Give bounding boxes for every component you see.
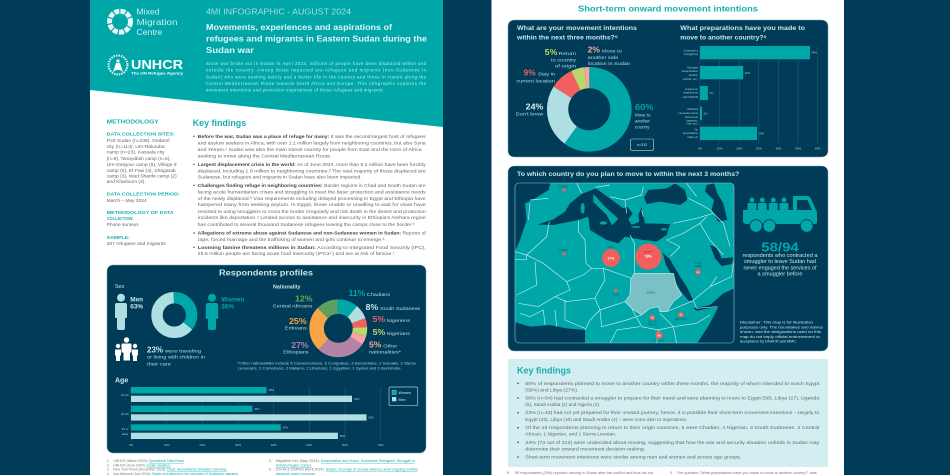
map disclaimer: purposes only. The boundaries and names	[740, 326, 823, 330]
bar chart: preparations: documents	[685, 115, 699, 119]
women label: Women	[221, 297, 244, 304]
map: 2%	[651, 317, 654, 319]
bar chart: preparations: preparations	[683, 131, 699, 135]
icon: woman	[206, 294, 218, 330]
nationality labels: 8%	[366, 303, 378, 312]
bar chart: preparations: (passport,	[686, 118, 698, 122]
intentions labels: of origin	[555, 63, 577, 68]
logo: UNHCR: The UN Refugee Agency	[131, 72, 184, 76]
references: Amhara Region Camps.	[276, 463, 312, 467]
map: 2%	[680, 315, 683, 317]
methodology column: DATA COLLECTION SITES:	[107, 132, 175, 138]
bar chart: preparations: 40%	[775, 146, 782, 150]
smuggler stat: smuggler to leave Sudan had	[744, 259, 816, 265]
bar chart: age: older	[122, 432, 128, 436]
smuggler stat: respondents who contracted a	[742, 253, 818, 259]
bar chart: preparations: vehicle, etc.)	[683, 77, 698, 81]
nationality labels: 5%	[373, 328, 385, 337]
bar chart: age: 58%	[340, 434, 346, 438]
bar chart: preparations: (tickets,	[689, 73, 698, 77]
men label: 63%	[130, 303, 143, 310]
title: Sudan war	[206, 45, 255, 55]
key findings text: of the newly displaced.³ Visa requirements including delayed processing in Egypt and Ethiopia have	[198, 196, 426, 201]
intentions labels: 2%	[588, 46, 600, 55]
bar chart: preparations: Leaving on	[685, 87, 698, 91]
country labels: FRANCE	[559, 186, 569, 189]
intentions labels: Don't know	[516, 112, 544, 117]
methodology column: Um-Gargour camp (5), Village 8	[107, 162, 177, 167]
country labels: SAUDI	[694, 262, 702, 265]
country labels: ETHIOPIA	[675, 318, 687, 321]
panel: intentions and preparations	[508, 20, 828, 157]
nationality labels: Central Africans	[273, 303, 313, 308]
page 1	[90, 0, 443, 475]
intro text: Central Mediterranean Route towards North Africa and Europe. This infographic explores the	[206, 81, 427, 86]
country labels: ALGERIA	[558, 249, 569, 252]
country labels: ARABIA	[693, 265, 703, 268]
bar chart: age: 34%	[254, 407, 260, 411]
legend: age	[389, 387, 418, 406]
methodology column: camp (5), El-Faw (3), Shagarab	[107, 168, 176, 173]
methodology column	[107, 120, 180, 246]
bar chart: preparations: resettlement	[683, 91, 698, 95]
panel: respondents profiles	[107, 265, 426, 453]
bar chart: preparations: 56%	[812, 50, 817, 54]
intro text: Sudan) who were seeking safety and a better life in the country and those in transit along the	[206, 74, 427, 79]
sample size box: n=312	[637, 143, 647, 147]
smuggler stat	[742, 240, 818, 277]
intentions labels: Move to	[635, 112, 651, 117]
methodology column: city (n=113), Um-Rakouba	[107, 144, 165, 149]
methodology column: METHODOLOGY OF DATA	[107, 210, 174, 216]
smuggler stat: 58/94	[761, 240, 800, 254]
methodology column: DATA COLLECTION PERIOD:	[107, 192, 180, 198]
bar chart: preparations: 10%	[717, 146, 723, 150]
nationality labels: Nigerians	[387, 331, 411, 336]
logo: UNHCR: UNHCR	[131, 58, 183, 72]
map: 59%	[645, 254, 652, 258]
bar chart: preparations: 50%	[795, 146, 801, 150]
nationality labels: South Sudanese	[380, 306, 421, 311]
nationality labels: 5%	[373, 315, 385, 324]
key findings text: Allegations of extreme abuse against Sudanese and non-Sudanese women in Sudan: Reports of	[198, 230, 427, 236]
question: preparations	[680, 25, 805, 41]
map disclaimer: acceptance by UNHCR and MMC.	[740, 340, 797, 344]
intentions labels: 9%	[524, 69, 536, 78]
map: 2%	[697, 272, 700, 274]
references: 6.	[269, 468, 272, 472]
methodology column: camp (3), Wad Sharife camp (2)	[107, 174, 177, 179]
country labels: LIBYA	[608, 246, 615, 249]
key findings heading: Key findings	[193, 118, 246, 129]
key findings text: rape, forced marriage and the trafficking of women and girls continue to emerge.⁶	[198, 237, 385, 242]
key findings text: has contributed to several thousand Sudanese refugees leaving the camps close to the border.⁵	[198, 222, 415, 227]
bar chart: preparations: 4%	[710, 91, 714, 95]
icon: family	[115, 337, 138, 361]
key findings 2 text: determine their onward movement decision-making.	[525, 446, 645, 452]
bar chart: age: 0%	[129, 443, 133, 447]
children stat: 23%	[147, 345, 163, 354]
bar chart: preparations: Contacted a	[684, 49, 698, 53]
nationality labels: Eritreans	[285, 325, 308, 330]
nationality labels: 25%	[289, 317, 307, 326]
page 2 heading: Short-term onward movement intentions	[578, 4, 758, 14]
bar chart: preparations: 30%	[756, 146, 762, 150]
key findings text: incidents like deportation.⁴ Limited access to assistance and insecurity in Ethiopia's Amhara region	[198, 215, 426, 220]
header band	[90, 0, 443, 127]
children stat: their care	[147, 361, 172, 366]
question: preparations: What preparations have you made to	[680, 25, 805, 32]
logo: Mixed Migration Centre	[110, 8, 178, 37]
intentions labels: Move to	[602, 49, 622, 54]
country markers	[562, 188, 701, 339]
map	[513, 182, 737, 347]
nationality heading: Nationality	[273, 284, 301, 290]
children stat: were traveling	[165, 348, 202, 353]
bar chart: age: 50%	[306, 443, 313, 447]
references: OCHA & OSRSG (April 2024): Sudan: Scourge of sexual violence amid ongoing conflict	[276, 468, 418, 472]
respondents heading: Respondents profiles	[219, 269, 314, 278]
bar chart: preparations: necessary travel	[678, 111, 698, 115]
title	[206, 22, 427, 55]
nationality labels: nationalities*	[369, 350, 401, 355]
bar chart: age: 38%	[268, 388, 274, 392]
key findings text: displaced, including 1.9 million to neighboring countries.² The vast majority of those displaced are	[198, 168, 426, 174]
key findings text: 25.6 million people are facing acute food insecurity (IPC3+) and are at risk of famine.⁷	[198, 251, 395, 256]
map question: To which country do you plan to move to within the next 3 months?	[517, 171, 739, 178]
women label: 36%	[221, 303, 234, 310]
header label: 4MI INFOGRAPHIC - AUGUST 2024	[206, 8, 352, 17]
intentions labels: another safe	[588, 55, 619, 60]
map disclaimer	[740, 320, 823, 344]
bar chart: preparations: 0%	[698, 146, 702, 150]
bar chart: preparations: 20%	[736, 146, 743, 150]
references: UNHCR (June 2024): Sudan situation.	[113, 463, 171, 467]
intentions labels: another	[635, 118, 650, 123]
methodology column: March – May 2024	[107, 198, 147, 203]
intentions labels: location in Sudan	[588, 61, 631, 66]
key findings text: resorted to using smugglers to cross the border irregularly and risk death in the desert and protection	[198, 209, 426, 214]
methodology column: SAMPLE:	[107, 235, 130, 241]
country borders	[515, 183, 733, 343]
references: UNHCR (March 2023): Operational Data Portal	[113, 459, 184, 463]
intentions labels: country	[635, 124, 650, 130]
nationality labels: Ethiopians	[283, 349, 310, 354]
map disclaimer: shown, and the designations used on this	[740, 330, 821, 334]
intentions labels	[516, 46, 654, 130]
legend: age: Women	[398, 391, 411, 395]
bar chart: age	[121, 387, 384, 447]
map: 6%	[657, 334, 662, 337]
question: intentions	[516, 25, 637, 41]
methodology column: and Khartoum (3).	[107, 179, 146, 184]
bar chart: preparations: with UNHCR	[683, 95, 698, 99]
bar chart: age: 70%	[378, 443, 384, 447]
nationality footnote	[238, 361, 416, 370]
question: intentions: What are your movement intentions	[517, 25, 637, 32]
key findings 2 heading: Key findings	[517, 365, 571, 376]
methodology column: 407 refugees and migrants	[107, 241, 167, 246]
country labels: SUDAN	[646, 291, 655, 294]
key findings 2 text: 56% (n=94) had contracted a smuggler to prepare for their travel and were planning to move to Egypt (58), Libya (27), Uganda	[525, 396, 820, 400]
bar chart: age: 30%	[235, 443, 241, 447]
nationality labels: Nigeriens	[387, 318, 411, 323]
key findings 2 text: African, 1 Nigerien, and 1 Sierra Leonian.	[525, 432, 616, 436]
sample size box	[630, 139, 654, 150]
Sudan	[625, 273, 682, 315]
bar chart: age: 66%	[368, 415, 374, 419]
key findings 2 text: Egypt (32), Libya (10) and Saudi Arabia (4) – were more akin to aspirations.	[525, 417, 687, 422]
legend: age: Men	[398, 398, 406, 402]
nationality footnote: Leoneans, 2 Comorians, 2 Malians, 2 Liberians, 1 Egyptian, 1 Syrian and 1 Burkinabe.	[238, 366, 402, 370]
men label: Men	[130, 297, 143, 304]
nationality labels	[273, 289, 421, 355]
nationality footnote: *Other nationalities include 6 Cameroonians, 6 Congolese, 3 Burundians, 2 Somalis, 2 Sierra	[238, 361, 416, 365]
donut: intentions	[558, 78, 621, 141]
intentions labels: to country	[551, 57, 577, 62]
key findings 2 text: 23% (n=43) had not yet prepared for their onward journey; hence, it is possible their short-term movement intentions – largely to	[525, 410, 820, 415]
country labels	[558, 186, 703, 342]
key findings text: and asylum seekers in Africa, with over 1.1 million largely from neighboring countries, but also Syria	[198, 140, 426, 146]
references: 2.	[107, 463, 110, 467]
intentions labels: 60%	[635, 103, 654, 112]
country labels: EGYPT	[644, 251, 653, 254]
key findings 2 text: Of the 16 respondents planning to return to their origin countries, 5 were Chadian, 4 Nigerian, 3 South Sudanese, 2 Central	[525, 425, 819, 430]
bar chart: preparations	[678, 46, 821, 150]
bar chart: preparations: No	[695, 128, 699, 132]
page 2 footnotes: 9	[670, 471, 672, 475]
title: Movements, experiences and aspirations of	[206, 22, 392, 32]
panel: destination map	[508, 166, 828, 351]
key findings 2 text	[525, 381, 820, 460]
seas	[513, 182, 737, 347]
bar chart: preparations: smuggler(s)	[684, 52, 698, 56]
bar chart: age: 20%	[199, 443, 206, 447]
references: 1.	[107, 459, 110, 463]
references: Migration Info (May 2024): Desperation and Hope: Sudanese Refugees' Struggle in	[276, 459, 415, 463]
nationality labels: 12%	[295, 295, 312, 304]
panel: key findings 2	[508, 359, 828, 467]
key findings text: hampered many from seeking asylum. In Egypt, those unable or unwilling to wait for visas have	[198, 202, 426, 207]
key findings text: Largest displacement crisis in the world: As of June 2024, more than 9.2 million have been forcibly	[198, 162, 427, 167]
key findings text: Challenges finding refuge in neighboring countries: Border regions in Chad and South Sudan are	[198, 183, 426, 188]
bar chart: preparations: 29%	[758, 132, 764, 136]
intentions labels: 5%	[545, 48, 557, 57]
bar chart: preparations: 1%	[704, 111, 708, 115]
map: 27%	[608, 256, 614, 260]
bar chart: age: 16-24	[121, 393, 129, 397]
nationality labels: 11%	[349, 289, 365, 298]
children stat: or living with children in	[147, 355, 206, 360]
key findings text: Looming famine threatens millions in Sudan: According to Integrated Food Security (IPC),	[198, 245, 426, 250]
key findings 2 text: 24% (73 out of 312) were undecided about moving, suggesting that how the war and security situation unfolds in Sudan may	[525, 440, 820, 445]
logo: Mixed Migration Centre: Migration	[136, 18, 178, 27]
smuggler stat: a smuggler before	[758, 271, 803, 277]
methodology column: Port Sudan (n=238), Gedaref	[107, 138, 171, 143]
key findings text: facing acute humanitarian crises and struggling to meet the basic protection and assistance needs	[198, 190, 427, 194]
question: preparations: move to another country?⁹	[680, 34, 767, 41]
intro text: movement intentions and protection experiences of these refugees and migrants.	[206, 88, 384, 93]
page 2 footnotes: 8	[507, 471, 509, 475]
methodology column: COLLECTION:	[107, 216, 134, 222]
references: 5.	[269, 459, 272, 463]
key findings text	[193, 134, 427, 256]
peninsulas and islands	[562, 194, 667, 230]
page 2 footnotes: The question "What preparations have you made to move to another country?" was	[677, 471, 817, 475]
nationality labels: 5%	[369, 341, 382, 350]
bar chart: age: 40%	[271, 443, 277, 447]
references: New York Times (November 2023): Chad: Humanitarian Situation Overview.	[113, 468, 227, 472]
key findings text: seeking to move along the Central Mediterranean Route.	[198, 154, 332, 158]
key findings text: Sudanese, but refugees and migrants in Sudan have also been impacted.	[198, 174, 362, 180]
bar chart: preparations: 22%	[745, 71, 751, 75]
bar chart: age: 42%	[283, 425, 289, 429]
bar chart: age: 62%	[354, 397, 360, 401]
key findings text: Before the war, Sudan was a place of refuge for many: It was the second-largest host of refugees	[198, 134, 427, 139]
bar chart: age: 10%	[164, 443, 170, 447]
bar chart: age: 24-34	[121, 412, 129, 416]
page 2	[492, 0, 844, 475]
methodology column: (n=8), Tanaydbah camp (n=5),	[107, 156, 171, 161]
page 2 footnotes	[507, 471, 817, 475]
key findings 2 text: (6), Saudi Arabia (2) and Algeria (2).	[525, 402, 600, 407]
intro text: outside the country. Among those impacted are refugees and migrants (non-Sudanese in	[206, 68, 427, 73]
key findings 2 text: Short-term movement intentions were similar among men and women and across age groups.	[525, 454, 741, 460]
donut: sex	[157, 298, 192, 332]
age heading: Age	[115, 378, 128, 385]
intentions labels: 24%	[526, 103, 543, 112]
intro text	[206, 61, 427, 93]
page 2 footnotes: 95 respondents (23%) reported arriving in Sudan after the conflict and thus did not	[515, 471, 653, 475]
intentions labels: current location	[516, 78, 556, 83]
intentions labels: Return	[558, 51, 577, 56]
country labels: UGANDA	[654, 339, 665, 342]
nationality labels: Chadians	[367, 292, 391, 297]
bar chart: preparations: made yet	[687, 135, 698, 139]
country labels: SOUTH	[648, 320, 657, 323]
bar chart: preparations: transportation	[682, 69, 699, 73]
icon: man	[115, 294, 127, 330]
logo: UNHCR	[108, 56, 184, 76]
nationality labels: Other	[383, 344, 398, 349]
bar chart: age: 60%	[342, 443, 348, 447]
logo: Mixed Migration Centre: Mixed	[136, 8, 160, 16]
key findings text: and Yemen.¹ Sudan was also the main transit country for people from East and the Horn of Africa	[198, 147, 422, 152]
nationality labels: 27%	[291, 341, 309, 350]
logo: Mixed Migration Centre: Centre	[136, 28, 163, 37]
smuggler stat: never engaged the services of	[744, 265, 817, 271]
sex heading: Sex	[115, 284, 125, 290]
country labels: CHAD	[612, 293, 619, 296]
icon: truck with passengers	[743, 196, 817, 232]
methodology column: METHODOLOGY	[107, 120, 159, 126]
methodology column: Phone surveys	[107, 222, 140, 227]
references	[107, 459, 418, 475]
children stat	[147, 345, 206, 366]
bar chart: age: 35 or	[122, 427, 128, 431]
methodology column: camp (n=23), Kassala city	[107, 150, 166, 155]
bar chart: preparations: Obtained	[687, 107, 698, 111]
map disclaimer: map do not imply official endorsement or	[740, 335, 821, 339]
intro text: Since war broke out in Sudan in April 2023, millions of people have been displaced within and	[206, 61, 427, 66]
question: intentions: within the next three months?⁹	[516, 34, 618, 41]
bar chart: preparations: Arranged	[687, 66, 698, 70]
donut: nationality	[317, 307, 360, 350]
bar chart: preparations: visa, etc.)	[686, 122, 698, 126]
key findings 2 text: 60% of respondents planned to move to another country within three months, the majority of whom intended to reach Egypt	[525, 381, 820, 386]
references: 3.	[107, 468, 110, 472]
intentions labels: Stay in	[538, 72, 556, 77]
map disclaimer: Disclaimer: This map is for illustration	[740, 320, 813, 324]
title: refugees and migrants in Eastern Sudan during the	[206, 34, 427, 44]
bar chart: preparations: 60%	[815, 146, 821, 150]
bullets	[517, 382, 519, 458]
key findings 2 text: (59%) and Libya (27%).	[525, 388, 578, 392]
country labels: SUDAN	[648, 324, 657, 327]
